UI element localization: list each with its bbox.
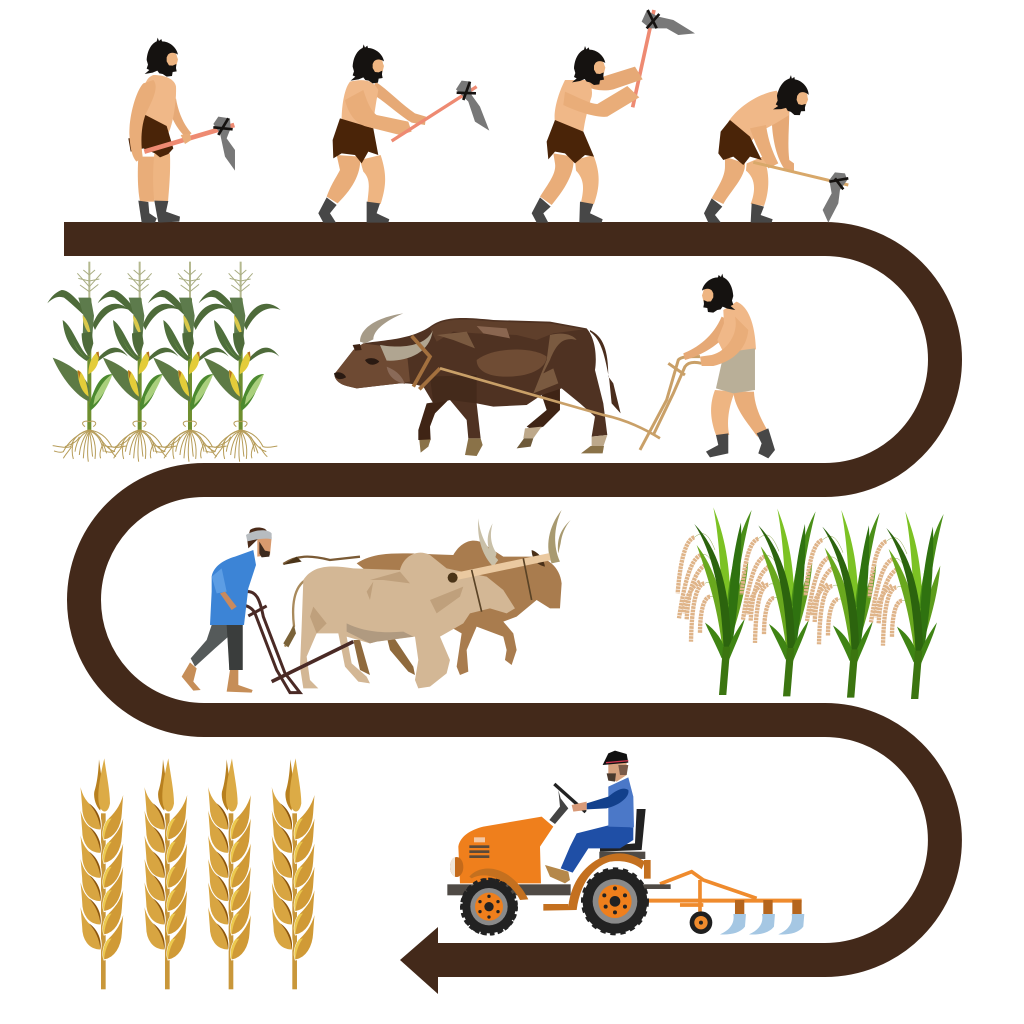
caveman 4 bent over striking ground: [704, 73, 848, 223]
orange tractor with driver and cultivator: [447, 751, 804, 934]
two oxen with yoke and farmer in blue shirt: [182, 510, 571, 693]
caveman 3 swinging hoe overhead: [532, 10, 695, 223]
winding road timeline with arrow: [64, 239, 945, 994]
caveman 2 raising hoe: [318, 44, 489, 223]
corn plants: [47, 262, 281, 462]
wheat ears: [79, 758, 316, 989]
caveman 1 holding stone hoe low: [128, 38, 235, 223]
rice plants: [678, 507, 944, 699]
buffalo pulling wooden plough: [334, 274, 775, 458]
